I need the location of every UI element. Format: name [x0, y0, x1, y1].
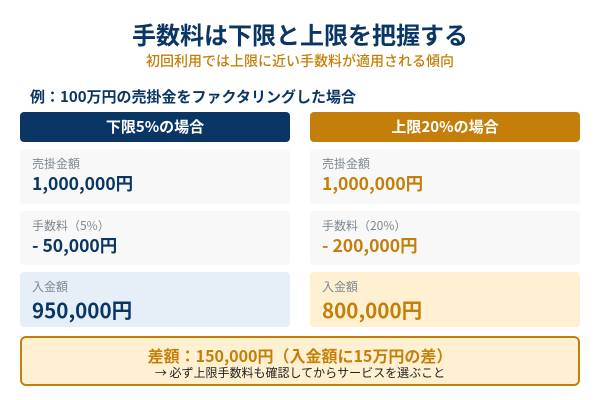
- callout heading: 差額：150,000円（入金額に15万円の差）: [148, 343, 452, 367]
- left column header: [20, 112, 290, 142]
- title: 手数料は下限と上限を把握する: [132, 16, 468, 51]
- panel: left receivable amount: [20, 149, 290, 204]
- panel: left receivable amount: 売掛金額: [32, 155, 80, 172]
- right column header: [310, 112, 580, 142]
- panel: left fee: [20, 211, 290, 265]
- panel: right deposit amount: [310, 272, 580, 327]
- right column header: 上限20%の場合: [391, 116, 499, 137]
- panel: right fee: - 200,000円: [322, 233, 418, 258]
- panel: right receivable amount: 1,000,000円: [322, 171, 423, 196]
- panel: right receivable amount: [310, 149, 580, 204]
- panel: left deposit amount: 入金額: [32, 278, 68, 295]
- panel: right deposit amount: 800,000円: [322, 294, 422, 324]
- callout: difference summary: [20, 336, 580, 386]
- panel: right deposit amount: 入金額: [322, 278, 358, 295]
- panel: left receivable amount: 1,000,000円: [32, 171, 133, 196]
- panel: right fee: [310, 211, 580, 265]
- panel: left fee: - 50,000円: [32, 233, 117, 258]
- callout note: → 必ず上限手数料も確認してからサービスを選ぶこと: [155, 364, 445, 381]
- subtitle: 初回利用では上限に近い手数料が適用される傾向: [146, 51, 454, 71]
- panel: left deposit amount: 950,000円: [32, 294, 132, 324]
- left column header: 下限5%の場合: [106, 116, 204, 137]
- panel: right receivable amount: 売掛金額: [322, 155, 370, 172]
- panel: left deposit amount: [20, 272, 290, 327]
- panel: right fee: 手数料（20%）: [322, 217, 406, 234]
- example heading: 例：100万円の売掛金をファクタリングした場合: [30, 86, 356, 107]
- panel: left fee: 手数料（5%）: [32, 217, 110, 234]
